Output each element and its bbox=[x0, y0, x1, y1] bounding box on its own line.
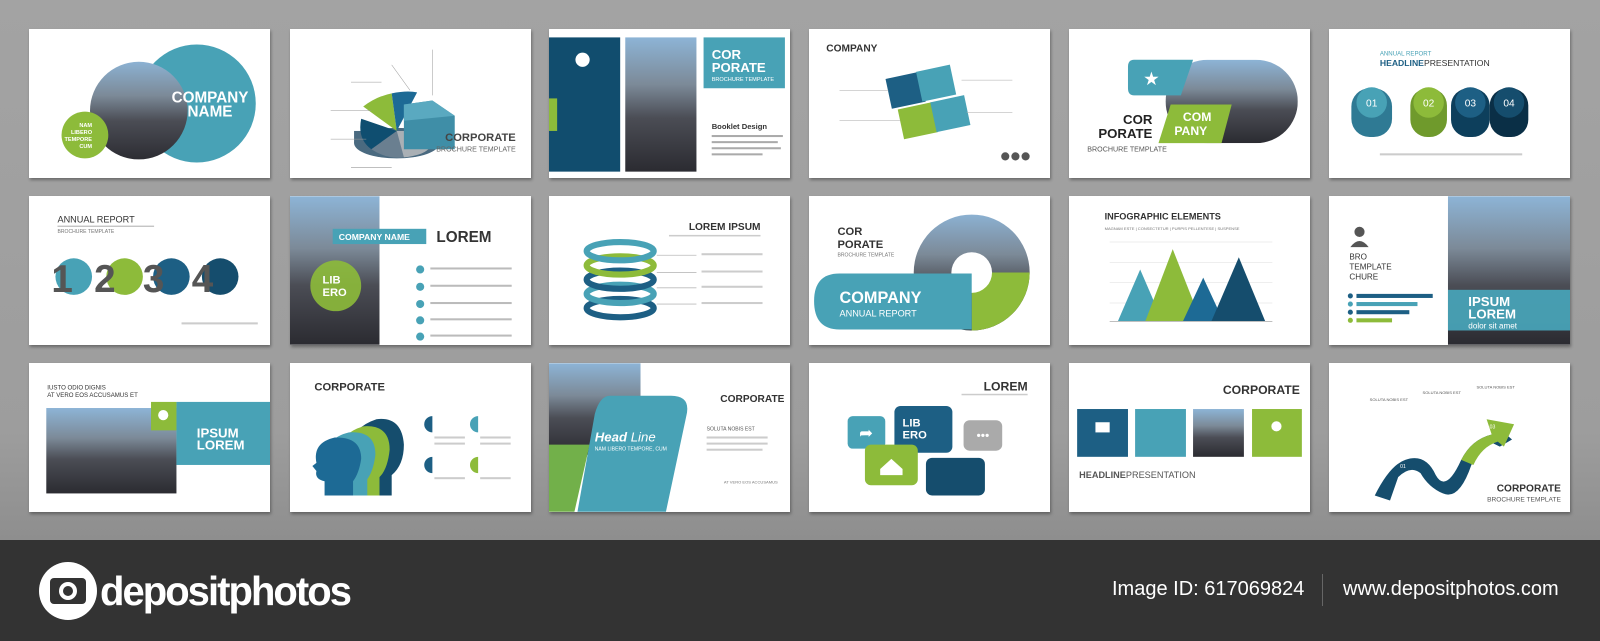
slide 1: company name circles: TEMPORE bbox=[64, 137, 92, 143]
slide 5: corporate company: COM bbox=[1183, 110, 1211, 124]
slide 18: wave arrow: CORPORATE bbox=[1497, 483, 1561, 494]
slide 8: company name lorem: ERO bbox=[323, 287, 347, 299]
slide 3: booklet design: BROCHURE TEMPLATE bbox=[712, 77, 774, 83]
slide 7: annual report 1234: 4 bbox=[192, 258, 214, 301]
slide 6: headline presentation cylinders: 03 bbox=[1465, 99, 1476, 110]
slide 5: corporate company: PORATE bbox=[1098, 126, 1153, 141]
slide 15: head line: Head Line bbox=[595, 430, 656, 445]
slide 18: wave arrow: 01 bbox=[1400, 464, 1406, 470]
image id: Image ID: 617069824 bbox=[1112, 578, 1304, 600]
slide 5: corporate company bbox=[1069, 29, 1310, 178]
slide 12: bro template chure bbox=[1329, 196, 1570, 345]
slide 8: company name lorem: LOREM bbox=[436, 229, 492, 246]
slide 18: wave arrow: 02 bbox=[1446, 446, 1452, 452]
slide 11: infographic elements triangles: INFOGRAPHIC ELEMENTS bbox=[1105, 212, 1221, 222]
slide 18: wave arrow: BROCHURE TEMPLATE bbox=[1487, 497, 1561, 504]
slide 18: wave arrow: 03 bbox=[1490, 424, 1495, 430]
slide 16: lorem squares: ••• bbox=[976, 429, 989, 443]
slide 2: pie chart bbox=[290, 29, 531, 178]
slide 17: headline presentation boxes: HEADLINEPRESENTATION bbox=[1079, 470, 1196, 480]
slide 5: corporate company: ★ bbox=[1143, 68, 1160, 89]
slide 6: headline presentation cylinders: 01 bbox=[1366, 99, 1378, 110]
slide 1: company name circles: NAM bbox=[79, 123, 92, 129]
slide 17: headline presentation boxes: CORPORATE bbox=[1223, 383, 1300, 397]
slide 1: company name circles: LIBERO bbox=[71, 130, 93, 136]
slide 15: head line bbox=[549, 363, 790, 512]
slide 5: corporate company: PANY bbox=[1174, 124, 1207, 138]
slide 9: lorem ipsum rings bbox=[549, 196, 790, 345]
slide 13: ipsum lorem photo: AT VERO EOS ACCUSAMUS ET bbox=[47, 392, 138, 399]
slide 6: headline presentation cylinders bbox=[1329, 29, 1570, 178]
slide 10: company annual report: COR bbox=[837, 226, 862, 238]
slide 15: head line: NAM LIBERO TEMPORE, CUM bbox=[595, 447, 667, 453]
slide 7: annual report 1234: 2 bbox=[94, 258, 116, 301]
slide 7: annual report 1234 bbox=[29, 196, 270, 345]
slide 6: headline presentation cylinders: HEADLINEPRESENTATION bbox=[1380, 58, 1490, 68]
slide 13: ipsum lorem photo bbox=[29, 363, 270, 512]
slide 7: annual report 1234: 3 bbox=[143, 258, 164, 301]
slide 11: infographic elements triangles: MAGNAM ESTE | CONSECTETUR | PURPIS PELLENTESE | SUSPENSE bbox=[1105, 226, 1240, 231]
slide 5: corporate company: BROCHURE TEMPLATE bbox=[1087, 145, 1167, 153]
website: www.depositphotos.com bbox=[1343, 578, 1559, 600]
slide 12: bro template chure: dolor sit amet bbox=[1468, 321, 1518, 330]
slide 12: bro template chure: CHURE bbox=[1349, 273, 1379, 282]
slide 5: corporate company: COR bbox=[1123, 112, 1153, 127]
slide 18: wave arrow: SOLUTA NOBIS EST bbox=[1476, 385, 1515, 390]
slide 13: ipsum lorem photo: LOREM bbox=[197, 438, 244, 453]
slide 18: wave arrow bbox=[1329, 363, 1570, 512]
slide 2: pie chart: BROCHURE TEMPLATE bbox=[436, 145, 516, 153]
slide 16: lorem squares: ➦ bbox=[859, 425, 873, 443]
slide 18: wave arrow: SOLUTA NOBIS EST bbox=[1423, 390, 1461, 395]
slide 1: company name circles: CUM bbox=[79, 144, 92, 150]
slide 10: company annual report: PORATE bbox=[837, 239, 884, 251]
slide 12: bro template chure: BRO bbox=[1349, 252, 1367, 261]
slide 12: bro template chure: IPSUM bbox=[1468, 294, 1510, 309]
slide 13: ipsum lorem photo: IPSUM bbox=[197, 426, 239, 441]
slide 4: puzzle: COMPANY bbox=[826, 44, 878, 55]
slide 1: company name circles bbox=[29, 29, 270, 178]
slide 13: ipsum lorem photo: IUSTO ODIO DIGNIS bbox=[47, 385, 106, 392]
slide 3: booklet design: PORATE bbox=[712, 60, 766, 75]
footer bar bbox=[0, 540, 1600, 641]
slide 6: headline presentation cylinders: 02 bbox=[1423, 99, 1435, 110]
slide 1: company name circles: COMPANY bbox=[172, 89, 248, 106]
slide 7: annual report 1234: 1 bbox=[51, 258, 73, 301]
slide 15: head line: SOLUTA NOBIS EST bbox=[707, 426, 755, 432]
slide 14: corporate heads: CORPORATE bbox=[314, 382, 386, 394]
slide 14: corporate heads bbox=[290, 363, 531, 512]
slide 10: company annual report: ANNUAL REPORT bbox=[840, 308, 917, 318]
slide 4: puzzle bbox=[809, 29, 1050, 178]
slide 6: headline presentation cylinders: 04 bbox=[1503, 99, 1515, 110]
slide 16: lorem squares bbox=[809, 363, 1050, 512]
slide 18: wave arrow: SOLUTA NOBIS EST bbox=[1370, 397, 1409, 402]
slide 8: company name lorem: LIB bbox=[323, 275, 341, 287]
slide 16: lorem squares: LIB bbox=[903, 417, 921, 429]
slide 10: company annual report: COMPANY bbox=[840, 289, 922, 307]
slide 7: annual report 1234: BROCHURE TEMPLATE bbox=[57, 229, 115, 235]
logo bbox=[39, 562, 351, 620]
slide 6: headline presentation cylinders: ANNUAL REPORT bbox=[1380, 51, 1432, 58]
slide 12: bro template chure: TEMPLATE bbox=[1349, 262, 1392, 271]
slide 11: infographic elements triangles bbox=[1069, 196, 1310, 345]
slide 17: headline presentation boxes bbox=[1069, 363, 1310, 512]
slide 9: lorem ipsum rings: LOREM IPSUM bbox=[689, 222, 761, 233]
slide 2: pie chart: CORPORATE bbox=[445, 132, 516, 144]
slide 16: lorem squares: LOREM bbox=[984, 380, 1028, 394]
logo: depositphotos bbox=[100, 568, 351, 614]
slide 15: head line: AT VERO EOS ACCUSAMUS bbox=[724, 479, 778, 484]
slide 8: company name lorem: COMPANY NAME bbox=[339, 232, 410, 242]
slide 1: company name circles: NAME bbox=[188, 104, 232, 121]
slide 3: booklet design: COR bbox=[712, 47, 742, 62]
slide 12: bro template chure: LOREM bbox=[1468, 306, 1516, 321]
slide 16: lorem squares: ERO bbox=[903, 430, 927, 442]
slide 15: head line: CORPORATE bbox=[720, 394, 785, 405]
slide 10: company annual report: BROCHURE TEMPLATE bbox=[837, 252, 895, 258]
slide 7: annual report 1234: ANNUAL REPORT bbox=[57, 215, 135, 225]
slide 10: company annual report bbox=[809, 196, 1050, 345]
slide 3: booklet design: Booklet Design bbox=[712, 122, 767, 131]
slide 8: company name lorem bbox=[290, 196, 531, 345]
slide 3: booklet design bbox=[549, 29, 790, 178]
